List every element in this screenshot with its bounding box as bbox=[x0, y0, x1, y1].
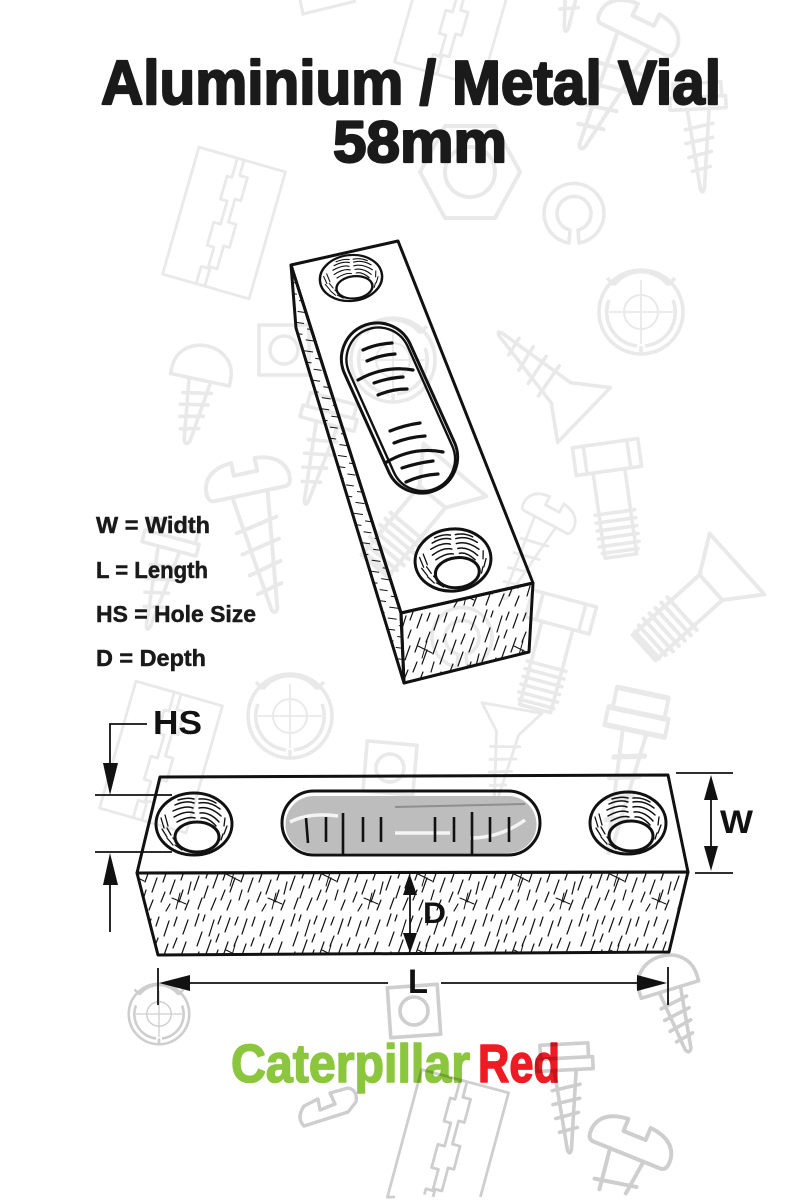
top fixing hole bbox=[318, 252, 384, 304]
bubble window bbox=[282, 791, 540, 855]
front elevation vial drawing bbox=[137, 775, 688, 955]
top face bbox=[137, 775, 688, 873]
brand logo: Caterpillar bbox=[231, 1034, 470, 1094]
background watermark: hardware outlines bbox=[100, 0, 764, 859]
dimension key bbox=[96, 512, 256, 671]
title: 58mm bbox=[333, 110, 507, 175]
W width dimension bbox=[676, 773, 754, 873]
depth face bbox=[137, 872, 688, 955]
isometric vial drawing bbox=[291, 241, 533, 683]
title: Aluminium / Metal Vial bbox=[101, 49, 721, 118]
dimension key: W = Width bbox=[96, 512, 210, 538]
end face bbox=[401, 583, 533, 683]
W width dimension: W bbox=[720, 804, 754, 840]
background watermark: lower hardware outlines bbox=[129, 948, 718, 1200]
dimension key: HS = Hole Size bbox=[96, 601, 256, 627]
brand logo: Red bbox=[478, 1034, 560, 1094]
D depth dimension bbox=[403, 875, 446, 953]
L length dimension: L bbox=[408, 963, 428, 1001]
dimension key: L = Length bbox=[96, 557, 208, 583]
bubble window bbox=[341, 323, 458, 493]
bottom fixing hole bbox=[412, 525, 494, 595]
L length dimension bbox=[158, 963, 668, 1005]
left hole bbox=[156, 793, 232, 855]
D depth dimension: D bbox=[423, 897, 446, 930]
title bbox=[101, 49, 721, 175]
HS hole size dimension: HS bbox=[153, 704, 202, 741]
dimension key: D = Depth bbox=[96, 645, 206, 671]
right hole bbox=[590, 792, 666, 854]
side face bbox=[291, 265, 404, 683]
HS hole size dimension bbox=[95, 704, 202, 932]
top face bbox=[291, 241, 533, 613]
